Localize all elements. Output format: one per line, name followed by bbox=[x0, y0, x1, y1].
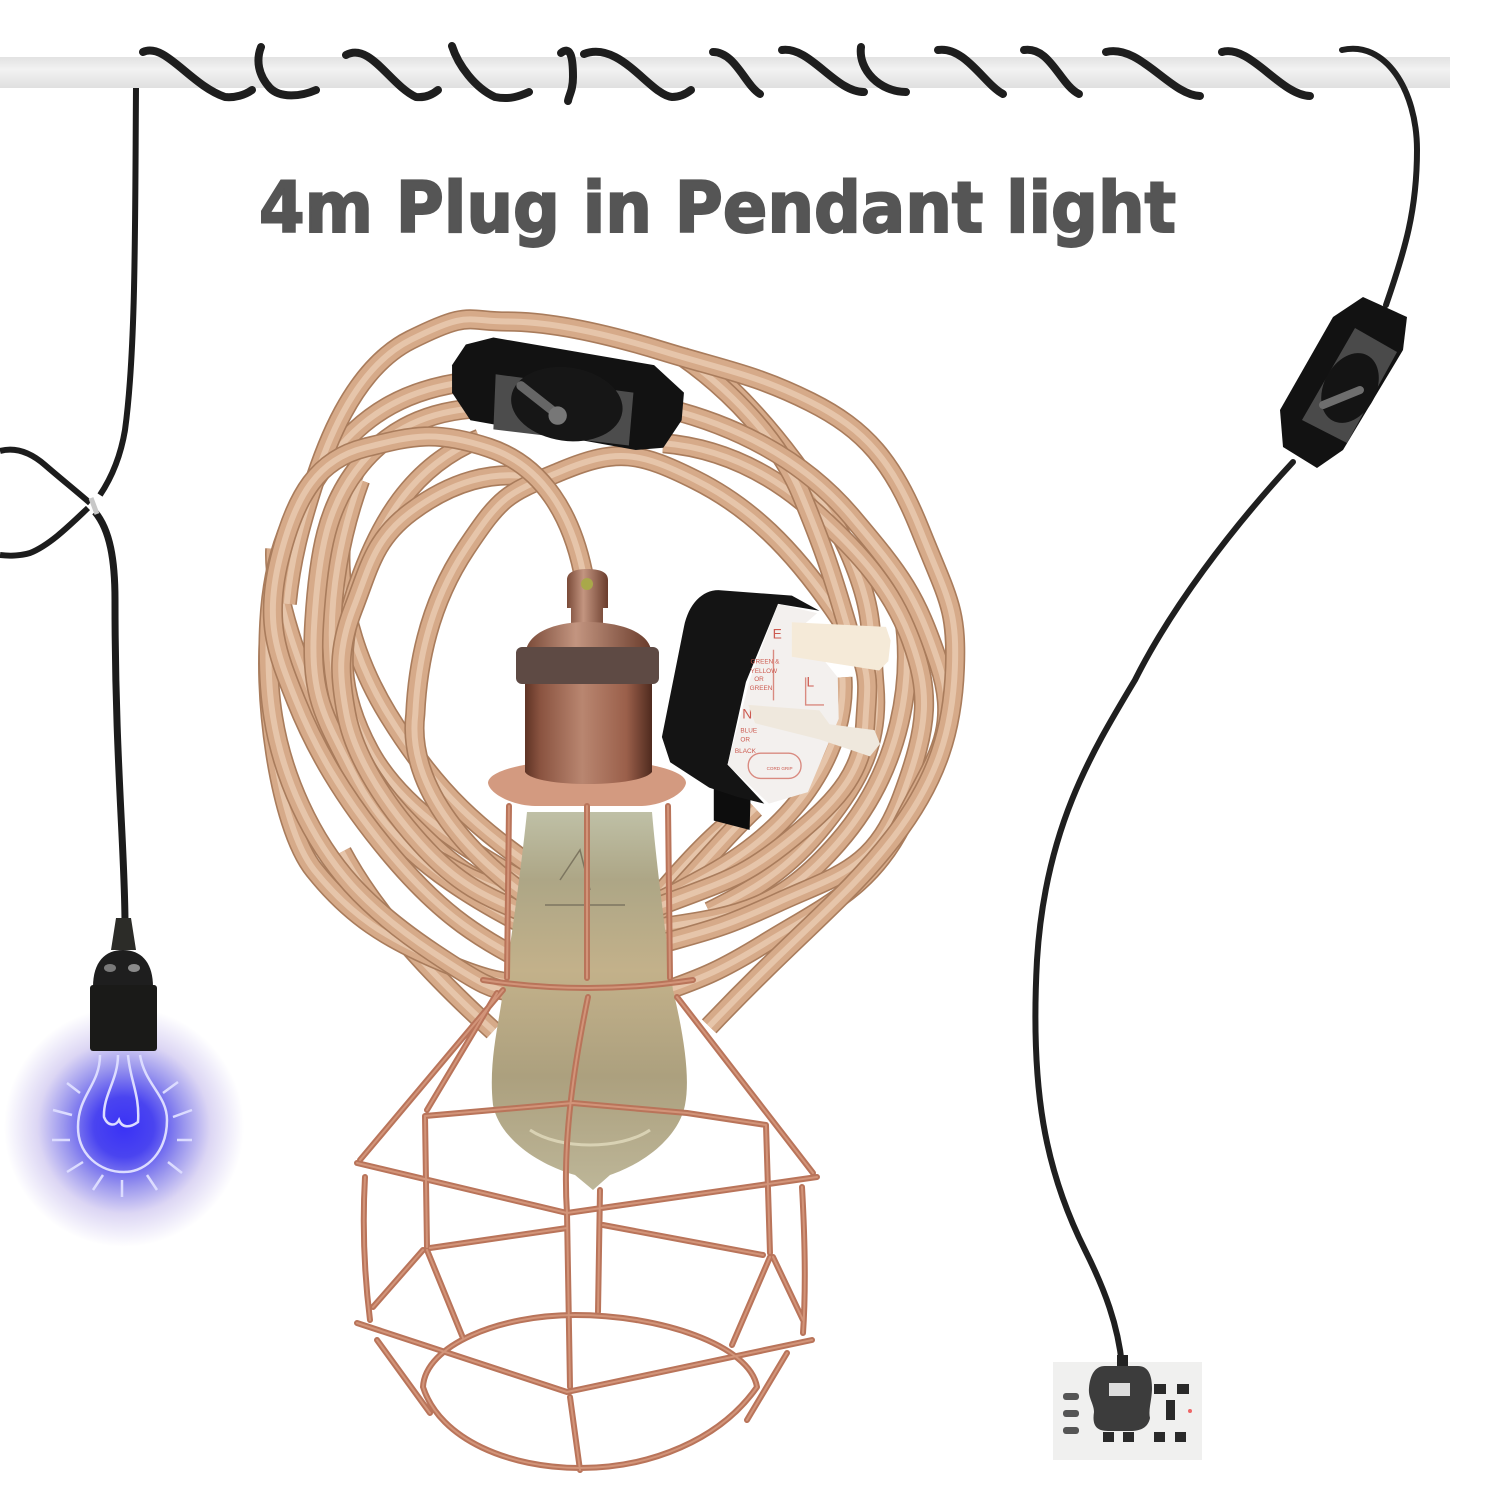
copper fabric cable coil bbox=[268, 319, 955, 1031]
title: 4m Plug in Pendant light bbox=[259, 167, 1176, 249]
UK plug: GREEN & bbox=[751, 659, 780, 666]
UK plug: OR bbox=[740, 737, 750, 744]
UK plug bbox=[662, 590, 891, 830]
blue glowing bulb bbox=[4, 1007, 244, 1247]
UK plug: OR bbox=[754, 676, 764, 683]
cage top plate bbox=[488, 760, 686, 806]
copper lamp socket bbox=[516, 569, 659, 784]
UK plug: N bbox=[742, 707, 752, 722]
left hanging cord bbox=[0, 88, 136, 925]
UK plug: E bbox=[773, 626, 782, 641]
wall socket with plug bbox=[1053, 1355, 1202, 1460]
black lamp holder bbox=[90, 918, 157, 1051]
UK plug: BLACK bbox=[735, 748, 757, 755]
UK plug: GREEN bbox=[750, 685, 773, 692]
center dimmer switch bbox=[452, 338, 684, 450]
UK plug: CORD GRIP bbox=[767, 766, 793, 771]
black cord wrapped around rail bbox=[143, 46, 1310, 101]
right cord from rail to wall socket bbox=[1035, 49, 1417, 1365]
glass bulb bbox=[492, 812, 687, 1190]
white rail bbox=[0, 57, 1450, 88]
UK plug: YELLOW bbox=[751, 668, 778, 675]
UK plug: L bbox=[807, 675, 815, 690]
copper wire cage bbox=[357, 806, 817, 1470]
UK plug: BLUE bbox=[740, 727, 757, 734]
right dimmer switch bbox=[1280, 297, 1407, 468]
